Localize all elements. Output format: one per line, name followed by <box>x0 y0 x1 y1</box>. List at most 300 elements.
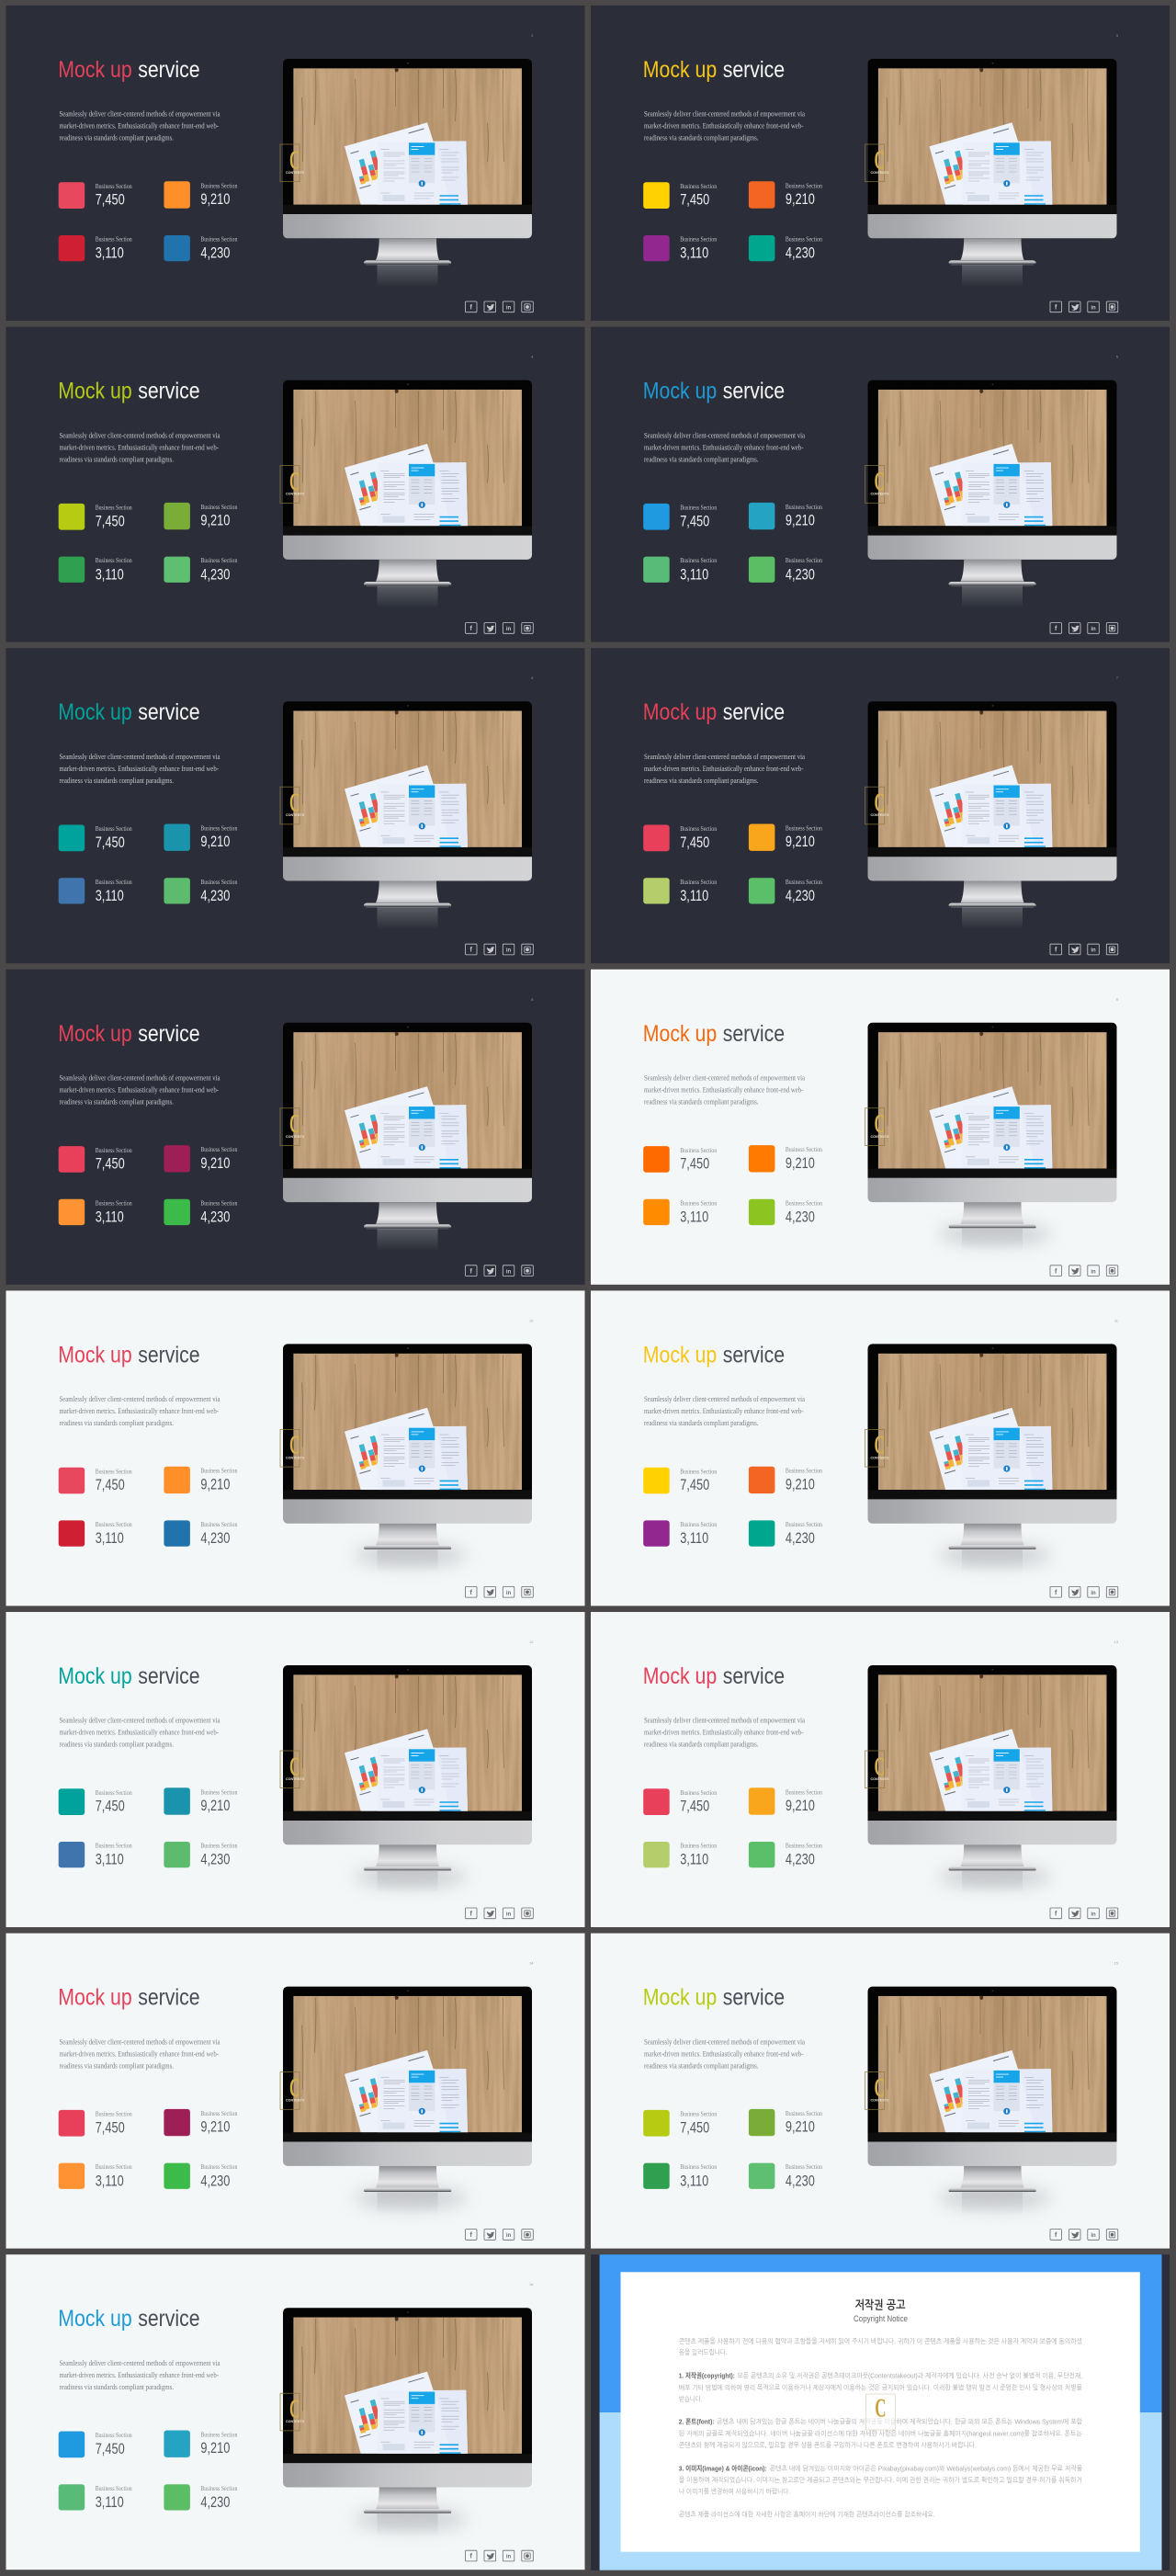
stat 9,210 <box>749 823 822 851</box>
stat 3,110: 3,110 <box>680 245 708 262</box>
stat 3,110 <box>643 1842 718 1868</box>
social icons <box>465 301 533 312</box>
social icons: in <box>506 1912 511 1917</box>
stat 3,110 <box>643 2163 718 2189</box>
stat 7,450: 7,450 <box>680 1156 709 1173</box>
panel: slide 12 light red amber <box>591 1612 1170 1927</box>
watermark logo: C <box>289 467 300 496</box>
body text <box>59 1716 220 1749</box>
stat 9,210: 9,210 <box>786 513 815 529</box>
body text: market-driven metrics. Enthusiastically enhance front-end web- <box>59 442 219 451</box>
body text: readiness via standards compliant paradigms. <box>59 2382 174 2391</box>
watermark logo: CONTENTS <box>286 2098 304 2103</box>
social icons <box>465 944 533 955</box>
stat 9,210 <box>164 503 238 529</box>
stat 7,450 <box>643 825 718 851</box>
stat 3,110: Business Section <box>96 236 132 244</box>
stat 7,450: Business Section <box>96 2432 132 2439</box>
watermark logo <box>865 1108 889 1145</box>
monitor mockup <box>283 380 532 608</box>
social icons: in <box>1091 948 1096 954</box>
body text: Seamlessly deliver client-centered methods of empowerment via <box>59 1716 220 1725</box>
stat 7,450: Business Section <box>96 1147 132 1154</box>
stat 3,110 <box>643 878 718 904</box>
body text: market-driven metrics. Enthusiastically enhance front-end web- <box>644 1728 804 1737</box>
section 2 font: 된 자체의 글꼴로 제작되었습니다. 네이버 나눔글꼴 라이선스에 대한 자세한 사항은 네이버 나눔글꼴 홈페이지(hangeul.naver.com)를 참조하세요. 폰트는 <box>679 2429 1082 2437</box>
monitor mockup <box>283 59 532 287</box>
stat 4,230: 4,230 <box>200 888 230 904</box>
body text: market-driven metrics. Enthusiastically enhance front-end web- <box>59 764 219 773</box>
panel: slide 10 light yellow <box>591 1290 1170 1606</box>
section 1 copyright: 배포 기타 방법에 의하여 영리 목적으로 이용하거나 제삼자에게 이용하는 것은 금지되어 있습니다. 이러한 불법 행위 발견 시 준엄한 민사 및 형사상의 처벌을 <box>679 2383 1082 2391</box>
social icons: in <box>1091 1591 1096 1596</box>
social icons: f <box>1055 948 1057 954</box>
section 1 copyright <box>679 2371 1082 2403</box>
stat 4,230 <box>749 1199 822 1226</box>
stat 4,230: Business Section <box>786 557 822 564</box>
stat 7,450: 7,450 <box>680 1799 709 1815</box>
page number: 4 <box>531 355 534 359</box>
watermark logo: CONTENTS <box>286 1455 304 1459</box>
social icons: in <box>506 1591 511 1596</box>
stat 4,230: Business Section <box>200 557 238 564</box>
heading <box>58 57 200 83</box>
copyright title: 저작권 공고 <box>854 2298 906 2312</box>
stat 9,210 <box>164 181 238 209</box>
stat 3,110: Business Section <box>96 557 132 564</box>
heading: service <box>138 1342 200 1367</box>
stat 7,450: Business Section <box>680 1789 718 1797</box>
stat 9,210: Business Section <box>786 1788 822 1796</box>
panel: copyright notice <box>591 2254 1170 2570</box>
stat 7,450 <box>59 182 132 209</box>
section 1 copyright: 받습니다. <box>679 2395 702 2403</box>
body text: market-driven metrics. Enthusiastically enhance front-end web- <box>59 2048 219 2058</box>
watermark logo: CONTENTS <box>871 1134 889 1139</box>
body text: Seamlessly deliver client-centered methods of empowerment via <box>59 430 220 439</box>
heading: Mock up <box>643 699 717 725</box>
stat 7,450: 7,450 <box>680 513 709 529</box>
heading: service <box>723 57 785 83</box>
body text: readiness via standards compliant paradigms. <box>644 133 759 142</box>
stat 7,450 <box>59 825 132 851</box>
section 2 font <box>679 2418 1082 2449</box>
watermark logo: C <box>875 1109 885 1139</box>
stat 3,110: Business Section <box>96 2163 132 2171</box>
heading: Mock up <box>643 1342 717 1367</box>
stat 4,230: 4,230 <box>200 1209 230 1226</box>
stat 9,210 <box>749 1145 822 1173</box>
body text: market-driven metrics. Enthusiastically enhance front-end web- <box>644 2048 804 2058</box>
watermark logo: CONTENTS <box>286 1776 304 1781</box>
stat 9,210 <box>749 181 822 209</box>
stat 9,210: 9,210 <box>200 834 230 850</box>
stat 9,210 <box>749 1787 822 1815</box>
social icons: f <box>470 1590 473 1596</box>
heading <box>58 1021 200 1047</box>
stat 9,210 <box>749 1467 822 1493</box>
heading: Mock up <box>58 699 132 725</box>
stat 3,110: Business Section <box>680 879 718 886</box>
stat 3,110: 3,110 <box>96 2494 124 2511</box>
heading: Mock up <box>58 1021 132 1047</box>
body text: readiness via standards compliant paradigms. <box>644 776 759 785</box>
social icons <box>465 1908 533 1919</box>
stat 7,450: 7,450 <box>96 1799 125 1815</box>
watermark logo: CONTENTS <box>871 170 889 175</box>
body text: readiness via standards compliant paradigms. <box>59 1418 174 1427</box>
heading: Mock up <box>643 379 717 404</box>
panel: slide 11 light teal <box>6 1612 584 1927</box>
body text <box>644 109 805 142</box>
body text: market-driven metrics. Enthusiastically enhance front-end web- <box>644 1085 804 1095</box>
heading <box>58 1985 200 2011</box>
watermark logo <box>280 2393 304 2431</box>
page number: 13 <box>1114 1640 1119 1644</box>
heading: service <box>138 57 200 83</box>
intro paragraph <box>679 2337 1082 2356</box>
monitor mockup <box>867 380 1117 608</box>
stat 9,210 <box>749 503 822 529</box>
stat 9,210: 9,210 <box>200 1155 230 1172</box>
watermark logo: C <box>875 1431 885 1460</box>
stat 7,450 <box>643 1146 718 1173</box>
heading <box>643 57 785 83</box>
page number: 3 <box>1116 33 1119 38</box>
stat 9,210: Business Section <box>200 1146 238 1153</box>
stat 9,210: Business Section <box>786 2110 822 2117</box>
heading: service <box>138 1663 200 1689</box>
watermark logo center: C <box>875 2394 886 2423</box>
body text: Seamlessly deliver client-centered methods of empowerment via <box>644 1073 805 1083</box>
monitor mockup <box>283 1665 532 1893</box>
stat 3,110: Business Section <box>96 2485 132 2492</box>
stat 4,230: Business Section <box>200 2485 238 2492</box>
monitor mockup <box>867 59 1117 287</box>
stat 9,210: Business Section <box>200 825 238 833</box>
watermark logo: CONTENTS <box>286 812 304 817</box>
body text: Seamlessly deliver client-centered methods of empowerment via <box>59 2037 220 2046</box>
stat 9,210 <box>164 2430 238 2457</box>
watermark logo: C <box>875 789 885 818</box>
heading: Mock up <box>58 1663 132 1689</box>
stat 7,450: 7,450 <box>96 1477 125 1493</box>
section 3 image and icon: 을 이용하여 제작되었습니다. 이미지는 참고로만 제공되고 콘텐츠와는 무관합니다. 이에 관한 권리는 귀하가 별도로 확인하고 필요할 경우 허가를 취득하거 <box>679 2476 1082 2484</box>
watermark logo <box>865 144 889 182</box>
social icons: in <box>506 948 511 954</box>
stat 4,230 <box>749 878 822 904</box>
social icons: in <box>1091 2233 1096 2239</box>
panel: slide 2 dark yellow <box>591 6 1170 321</box>
heading: Mock up <box>643 57 717 83</box>
body text <box>644 752 805 785</box>
page number: 2 <box>531 33 534 38</box>
watermark logo: C <box>289 145 300 175</box>
stat 3,110: 3,110 <box>96 245 124 262</box>
social icons: f <box>1055 305 1057 311</box>
stat 4,230: Business Section <box>200 1843 238 1850</box>
section 2 font: 2. 폰트(font): <box>679 2418 715 2426</box>
social icons: f <box>470 948 473 954</box>
stat 3,110 <box>643 1199 718 1226</box>
stat 3,110: 3,110 <box>680 1530 708 1547</box>
body text <box>644 2037 805 2070</box>
body text: market-driven metrics. Enthusiastically enhance front-end web- <box>644 121 804 131</box>
heading: service <box>723 1663 785 1689</box>
body text <box>59 1394 220 1427</box>
stat 9,210: Business Section <box>786 1468 822 1475</box>
monitor mockup <box>867 1987 1117 2215</box>
heading: service <box>723 1342 785 1367</box>
heading <box>58 699 200 725</box>
stat 3,110 <box>59 235 132 262</box>
monitor mockup <box>283 1023 532 1251</box>
social icons <box>465 2550 533 2561</box>
stat 4,230 <box>749 1520 822 1547</box>
heading: service <box>138 2306 200 2332</box>
stat 3,110 <box>643 1520 718 1547</box>
monitor mockup <box>867 1344 1117 1572</box>
stat 3,110: 3,110 <box>96 888 124 904</box>
stat 9,210: 9,210 <box>786 1155 815 1172</box>
stat 7,450 <box>59 504 132 530</box>
page number: 7 <box>1116 675 1119 680</box>
section 2 font: 콘텐츠와 함께 제공되지 않으므로, 필요할 경우 상용 폰트를 구입하거나 다른 폰트로 변경하여 사용하시기 바랍니다. <box>679 2441 977 2449</box>
heading: Mock up <box>58 57 132 83</box>
heading: service <box>723 379 785 404</box>
body text <box>644 1716 805 1749</box>
body text: market-driven metrics. Enthusiastically enhance front-end web- <box>59 1406 219 1415</box>
body text: readiness via standards compliant paradigms. <box>644 454 759 463</box>
page number: 15 <box>1114 1961 1119 1966</box>
panel: slide 7 dark red magenta <box>6 970 584 1285</box>
stat 7,450: Business Section <box>680 1147 718 1154</box>
stat 9,210: 9,210 <box>786 2119 815 2136</box>
body text: Seamlessly deliver client-centered methods of empowerment via <box>59 1394 220 1403</box>
stat 9,210 <box>164 1467 238 1493</box>
body text: readiness via standards compliant paradigms. <box>59 454 174 463</box>
body text: readiness via standards compliant paradigms. <box>644 2060 759 2070</box>
watermark logo: CONTENTS <box>871 492 889 496</box>
body text <box>59 752 220 785</box>
stat 3,110: 3,110 <box>680 1852 708 1868</box>
body text: readiness via standards compliant paradigms. <box>59 1097 174 1106</box>
stat 4,230 <box>749 1842 822 1868</box>
heading <box>643 1342 785 1367</box>
heading: service <box>723 1021 785 1047</box>
stat 4,230: Business Section <box>786 1199 822 1207</box>
stat 9,210: 9,210 <box>200 513 230 529</box>
stat 4,230: 4,230 <box>786 245 815 262</box>
stat 3,110: Business Section <box>680 1199 718 1207</box>
panel: slide 6 dark red amber <box>591 648 1170 963</box>
heading: service <box>138 1021 200 1047</box>
watermark logo <box>280 466 304 503</box>
stat 7,450: Business Section <box>680 1468 718 1475</box>
stat 4,230: Business Section <box>786 879 822 886</box>
heading: Mock up <box>58 379 132 404</box>
watermark logo: CONTENTS <box>286 1134 304 1139</box>
stat 4,230: Business Section <box>200 879 238 886</box>
monitor mockup <box>283 701 532 929</box>
social icons: in <box>1091 1269 1096 1275</box>
social icons: f <box>470 1912 473 1917</box>
body text: Seamlessly deliver client-centered methods of empowerment via <box>644 752 805 761</box>
stat 9,210: Business Section <box>786 825 822 833</box>
watermark logo: C <box>289 1752 300 1781</box>
social icons: in <box>1091 1912 1096 1917</box>
stat 3,110: 3,110 <box>680 566 708 583</box>
intro paragraph: 콘텐츠 제품을 사용하기 전에 다음의 협약과 조항들을 자세히 읽어 주시기 바랍니다. 귀하가 이 콘텐츠 제품을 사용하는 것은 사용자 계약과 보증에 동의하셨 <box>679 2337 1082 2345</box>
heading <box>643 1985 785 2011</box>
stat 3,110: Business Section <box>96 1521 132 1528</box>
stat 3,110: 3,110 <box>96 566 124 583</box>
heading <box>643 1663 785 1689</box>
section 3 image and icon: 콘텐츠 내에 담겨있는 이미지와 아이콘은 Pixabay(pixabay.com)와 Webalys(webalys.com) 등에서 제공한 무료 저작물 <box>770 2464 1082 2472</box>
social icons: in <box>506 2555 511 2560</box>
section 3 image and icon <box>679 2463 1082 2495</box>
stat 3,110: Business Section <box>680 557 718 564</box>
stat 7,450 <box>59 1468 132 1493</box>
stat 7,450: Business Section <box>680 505 718 512</box>
stat 3,110: 3,110 <box>680 888 708 904</box>
stat 4,230: Business Section <box>200 1521 238 1528</box>
stat 3,110 <box>59 2163 132 2189</box>
heading: service <box>723 1985 785 2011</box>
social icons: f <box>1055 2232 1057 2239</box>
stat 9,210: Business Section <box>786 1146 822 1153</box>
stat 9,210 <box>164 2109 238 2136</box>
page number: 6 <box>531 675 534 680</box>
body text: market-driven metrics. Enthusiastically enhance front-end web- <box>59 1728 219 1737</box>
stat 3,110: Business Section <box>96 1843 132 1850</box>
panel: slide 3 dark lime <box>6 327 584 642</box>
watermark logo <box>280 1108 304 1145</box>
stat 3,110: 3,110 <box>96 1209 124 1226</box>
social icons <box>1050 944 1118 955</box>
stat 7,450: 7,450 <box>96 1156 125 1173</box>
watermark logo: CONTENTS <box>286 2419 304 2423</box>
heading: Mock up <box>643 1663 717 1689</box>
heading <box>58 2306 200 2332</box>
heading: Mock up <box>58 1342 132 1367</box>
stat 4,230 <box>164 557 238 583</box>
stat 9,210: Business Section <box>200 2110 238 2117</box>
heading <box>643 379 785 404</box>
page number: 5 <box>1116 355 1119 359</box>
stat 4,230: 4,230 <box>786 1530 815 1547</box>
body text: Seamlessly deliver client-centered methods of empowerment via <box>59 109 220 119</box>
stat 7,450: 7,450 <box>680 834 709 851</box>
stat 4,230 <box>749 235 822 262</box>
stat 4,230 <box>164 2163 238 2189</box>
panel: slide 14 light lime <box>591 1934 1170 2249</box>
panel: slide 1 dark red <box>6 6 584 321</box>
watermark logo: CONTENTS <box>871 1776 889 1781</box>
social icons: f <box>1055 1590 1057 1596</box>
watermark logo: C <box>289 2073 300 2103</box>
body text: market-driven metrics. Enthusiastically enhance front-end web- <box>59 2370 219 2379</box>
social icons <box>465 623 533 633</box>
social icons <box>1050 1908 1118 1919</box>
stat 7,450 <box>643 504 718 530</box>
watermark logo: C <box>289 789 300 818</box>
stat 9,210 <box>749 2109 822 2136</box>
panel: slide 4 dark blue <box>591 327 1170 642</box>
stat 3,110: Business Section <box>96 1199 132 1207</box>
watermark logo <box>280 1429 304 1467</box>
social icons: f <box>1055 1912 1057 1917</box>
body text: market-driven metrics. Enthusiastically enhance front-end web- <box>59 121 219 131</box>
stat 9,210: Business Section <box>200 2431 238 2438</box>
body text: readiness via standards compliant paradigms. <box>644 1097 759 1106</box>
body text: Seamlessly deliver client-centered methods of empowerment via <box>644 1716 805 1725</box>
stat 9,210 <box>164 823 238 851</box>
stat 4,230: Business Section <box>786 236 822 244</box>
social icons: f <box>470 2232 473 2239</box>
section 1 copyright: 모든 콘텐츠의 소유 및 저작권은 콘텐츠테이크아웃(Contentstakeout)과 제작자에게 있습니다. 사전 승낙 없이 불법적 이용, 무단전재, <box>737 2372 1082 2380</box>
stat 3,110 <box>59 1842 132 1868</box>
watermark logo: C <box>289 1431 300 1460</box>
stat 7,450: Business Section <box>680 183 718 190</box>
body text: market-driven metrics. Enthusiastically enhance front-end web- <box>59 1085 219 1095</box>
watermark logo: CONTENTS <box>871 1455 889 1459</box>
stat 7,450: Business Section <box>680 825 718 833</box>
heading <box>58 1342 200 1367</box>
social icons <box>465 1265 533 1276</box>
stat 9,210: 9,210 <box>786 834 815 850</box>
stat 3,110: Business Section <box>96 879 132 886</box>
panel: slide 13 light red magenta <box>6 1934 584 2249</box>
watermark logo <box>865 1751 889 1788</box>
watermark logo <box>865 1429 889 1467</box>
stat 7,450 <box>643 1468 718 1493</box>
watermark logo <box>865 787 889 824</box>
stat 4,230: 4,230 <box>786 566 815 583</box>
stat 9,210: 9,210 <box>786 1476 815 1492</box>
stat 4,230 <box>164 878 238 904</box>
body text: Seamlessly deliver client-centered methods of empowerment via <box>644 1394 805 1403</box>
social icons: in <box>506 305 511 311</box>
stat 7,450: 7,450 <box>680 1477 709 1493</box>
monitor mockup <box>867 1023 1117 1251</box>
stat 7,450 <box>59 1146 132 1173</box>
watermark logo <box>865 2072 889 2109</box>
stat 3,110: 3,110 <box>680 1209 708 1226</box>
heading: service <box>138 699 200 725</box>
page number: 11 <box>1114 1318 1119 1322</box>
stat 3,110: 3,110 <box>96 1530 124 1547</box>
social icons: f <box>470 2554 473 2560</box>
heading: Mock up <box>643 1021 717 1047</box>
heading: service <box>138 379 200 404</box>
stat 9,210 <box>164 1145 238 1173</box>
stat 9,210: Business Section <box>200 1468 238 1475</box>
social icons: f <box>1055 1268 1057 1275</box>
stat 4,230 <box>164 1199 238 1226</box>
page number: 16 <box>529 2282 534 2287</box>
body text <box>59 2037 220 2070</box>
heading <box>58 1663 200 1689</box>
social icons: in <box>1091 305 1096 311</box>
heading: service <box>723 699 785 725</box>
watermark logo: CONTENTS <box>286 492 304 496</box>
stat 3,110 <box>59 878 132 904</box>
stat 4,230 <box>164 235 238 262</box>
stat 7,450: 7,450 <box>96 834 125 851</box>
stat 9,210: 9,210 <box>200 2440 230 2457</box>
stat 7,450 <box>59 1788 132 1815</box>
